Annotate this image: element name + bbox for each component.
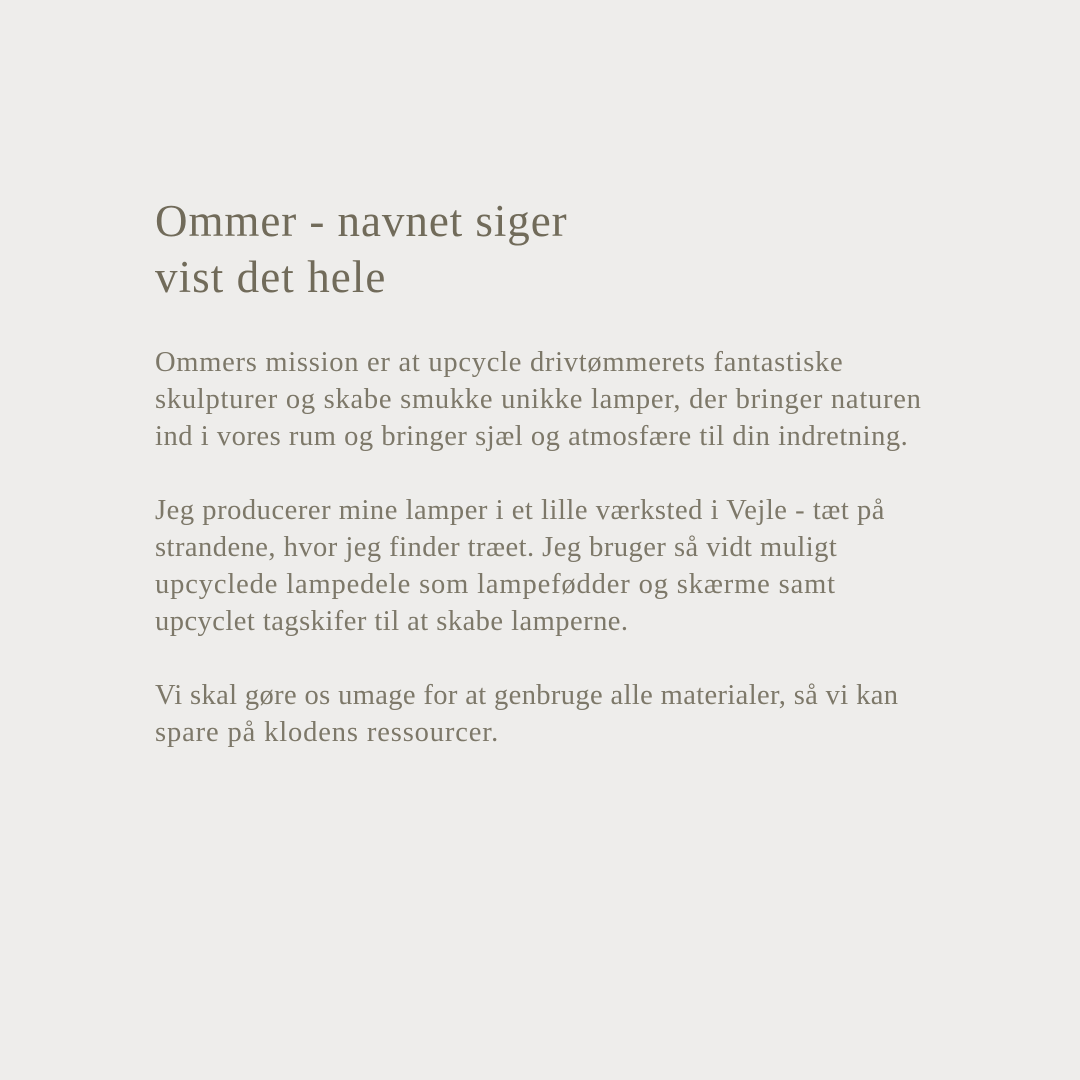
text block: mission: skulpturer og skabe smukke unikke lamper, der bringer naturen — [155, 384, 922, 415]
text block: production: strandene, hvor jeg finder træet. Jeg bruger så vidt muligt — [155, 532, 837, 563]
text block: production — [155, 495, 885, 637]
text block: recycling: spare på klodens ressourcer. — [155, 717, 499, 748]
text block: production: Jeg producerer mine lamper i et lille værksted i Vejle - tæt på — [155, 495, 885, 526]
text block: mission — [155, 347, 922, 452]
text block: mission: Ommers mission er at upcycle drivtømmerets fantastiske — [155, 347, 843, 378]
title — [155, 196, 568, 302]
title: Ommer - navnet siger — [155, 196, 568, 246]
title: vist det hele — [155, 252, 386, 302]
text block: production: upcyclede lampedele som lampefødder og skærme samt — [155, 569, 836, 600]
text block: production: upcyclet tagskifer til at skabe lamperne. — [155, 606, 629, 637]
text block: recycling — [155, 680, 898, 748]
text block: recycling: Vi skal gøre os umage for at genbruge alle materialer, så vi kan — [155, 680, 898, 711]
text block: mission: ind i vores rum og bringer sjæl og atmosfære til din indretning. — [155, 421, 908, 452]
